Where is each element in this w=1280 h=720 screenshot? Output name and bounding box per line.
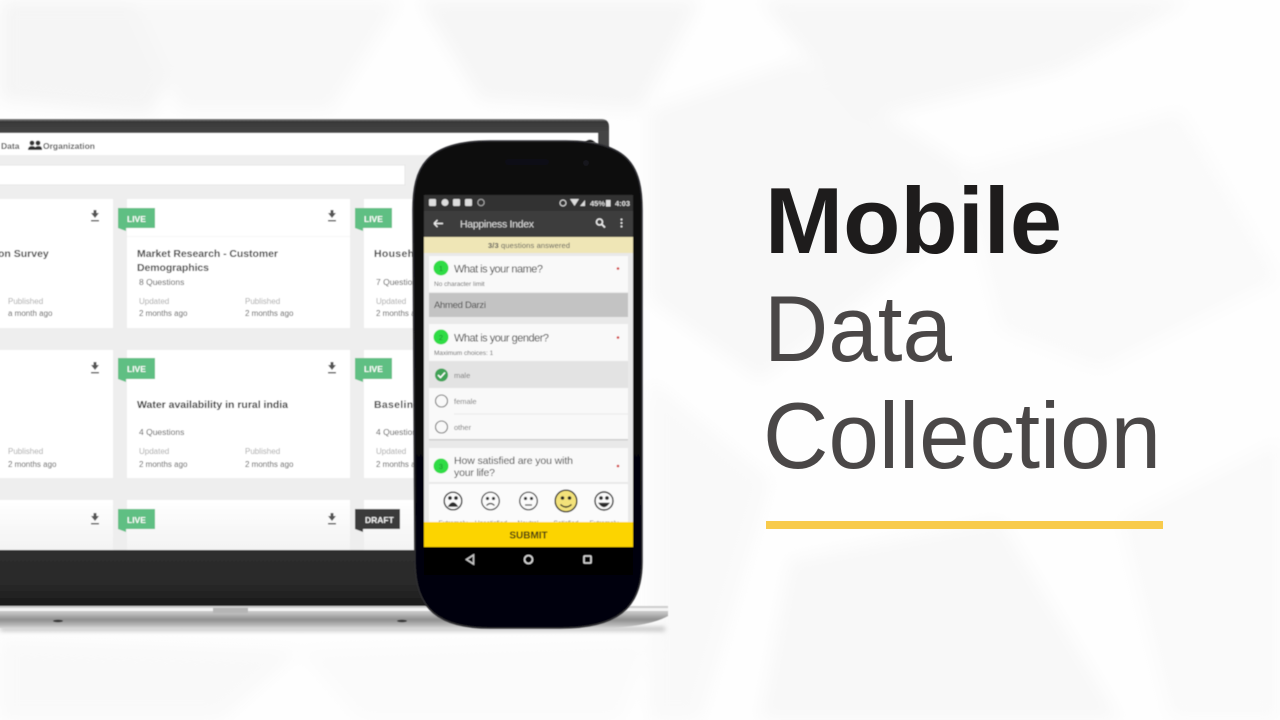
survey card: Water availability: [127, 350, 350, 478]
title word: Data: Data: [764, 276, 953, 381]
webcam bump: [584, 140, 596, 143]
hinge notch: [213, 608, 248, 613]
question 2: Maximum choices: 1: [434, 350, 494, 357]
question 3: Extremely: [590, 520, 619, 527]
icon: very unhappy face: [444, 492, 462, 510]
question 2: female: [454, 397, 477, 406]
survey card row 2 left: [0, 350, 113, 478]
LIVE tags: LIVE: [364, 214, 383, 224]
question 3: 3: [439, 464, 443, 471]
survey cards row 3: [0, 500, 604, 550]
phone camera: [583, 160, 589, 166]
DRAFT tag: [355, 509, 400, 532]
app bar: Happiness Index: [460, 218, 535, 230]
icon: unhappy face: [482, 492, 499, 510]
survey card row 1 left: [0, 199, 113, 328]
icon: satisfied face selected: [555, 490, 577, 512]
question 3: Neutral: [518, 520, 539, 527]
progress banner: [424, 237, 633, 253]
title: [763, 168, 1161, 488]
LIVE tags: LIVE: [127, 214, 146, 224]
LIVE tags: LIVE: [127, 364, 146, 374]
survey card: Household: 2 months ago: [376, 309, 425, 318]
laptop: [0, 119, 668, 631]
survey card: Market Research: Updated: [139, 297, 169, 306]
laptop screen: [0, 133, 604, 550]
question 1: Ahmed Darzi: [434, 300, 486, 311]
survey card: Market Research: 8 Questions: [139, 277, 184, 287]
submit button: [424, 522, 633, 547]
survey card: Water availability: 2 months ago: [139, 460, 188, 469]
question 3: your life?: [454, 467, 495, 479]
phone speaker: [505, 159, 549, 165]
app bar: [424, 211, 633, 237]
survey card row 2 left: 2 months ago: [8, 460, 57, 469]
survey card: Market Research: Market Research - Customer: [137, 248, 278, 260]
survey card row 1 left: a month ago: [8, 309, 53, 318]
survey card: Market Research: Demographics: [137, 262, 209, 274]
question 1: No character limit: [434, 281, 485, 288]
title word: Mobile: Mobile: [765, 168, 1062, 273]
laptop base: [0, 606, 668, 628]
survey card: Baseline: Baseline: [374, 399, 420, 411]
survey card: Market Research: [127, 199, 350, 328]
icon: organization people: [28, 141, 42, 150]
LIVE tags: LIVE: [127, 515, 146, 525]
icon: neutral face: [520, 492, 537, 510]
yellow underline: [766, 521, 1163, 529]
question 2: What is your gender?: [454, 332, 549, 344]
question 2: male: [454, 371, 470, 380]
question 1: 1: [439, 266, 443, 273]
LIVE tags: LIVE: [364, 364, 383, 374]
phone body: [413, 141, 642, 628]
survey card: Baseline: 2 months ago: [376, 460, 425, 469]
survey card: Water availability: Published: [245, 447, 280, 456]
phone: [413, 141, 642, 628]
progress banner: 3/3 questions answered: [488, 241, 570, 250]
question 3: [429, 448, 628, 527]
survey card: Market Research: Published: [245, 297, 280, 306]
question 3: Unsatisfied: [475, 520, 507, 527]
survey card: Household: Updated: [376, 297, 406, 306]
laptop base shadow: [0, 627, 665, 631]
laptop lid and bezel: [0, 119, 609, 560]
survey card: Water availability: 4 Questions: [139, 427, 184, 437]
phone screen: [424, 195, 633, 575]
question 1: What is your name?: [454, 264, 543, 276]
status bar: [424, 195, 633, 211]
navigation bar: Organization: [43, 141, 95, 151]
survey card: Market Research: 2 months ago: [245, 309, 294, 318]
navigation bar: Data: [1, 141, 20, 151]
survey card row 1 left: Published: [8, 297, 43, 306]
question 2: [429, 324, 628, 440]
question 3: Satisfied: [554, 520, 579, 527]
question 1: [429, 256, 628, 317]
question 2: 2: [439, 335, 443, 342]
survey card: Water availability: Updated: [139, 447, 169, 456]
DRAFT tag: DRAFT: [365, 515, 395, 525]
survey card: Baseline: [364, 350, 604, 478]
question 2: other: [454, 423, 472, 432]
survey card: Water availability: 2 months ago: [245, 460, 294, 469]
android navigation bar: [424, 547, 633, 575]
survey card: Water availability: Water availability in rural india: [137, 399, 288, 411]
status bar: 45%: [590, 199, 605, 208]
survey card: Baseline: Updated: [376, 447, 406, 456]
submit button: SUBMIT: [509, 530, 548, 542]
survey card: Market Research: 2 months ago: [139, 309, 188, 318]
survey card: Household: Household Survey: [374, 248, 471, 260]
icon: very happy face: [595, 492, 613, 510]
survey card: Baseline: 4 Questions: [376, 427, 421, 437]
question 3: How satisfied are you with: [454, 455, 573, 467]
title word: Collection: Collection: [763, 383, 1161, 488]
LIVE tags: [118, 208, 392, 532]
survey card: Household: 7 Questions: [376, 277, 421, 287]
survey card row 2 left: Published: [8, 447, 43, 456]
status bar: 4:03: [615, 199, 630, 208]
search box: [0, 165, 405, 185]
question 3: Extremely: [439, 520, 468, 527]
laptop chin: [0, 550, 615, 606]
navigation bar: [0, 133, 598, 155]
survey card: Household: [364, 199, 604, 328]
